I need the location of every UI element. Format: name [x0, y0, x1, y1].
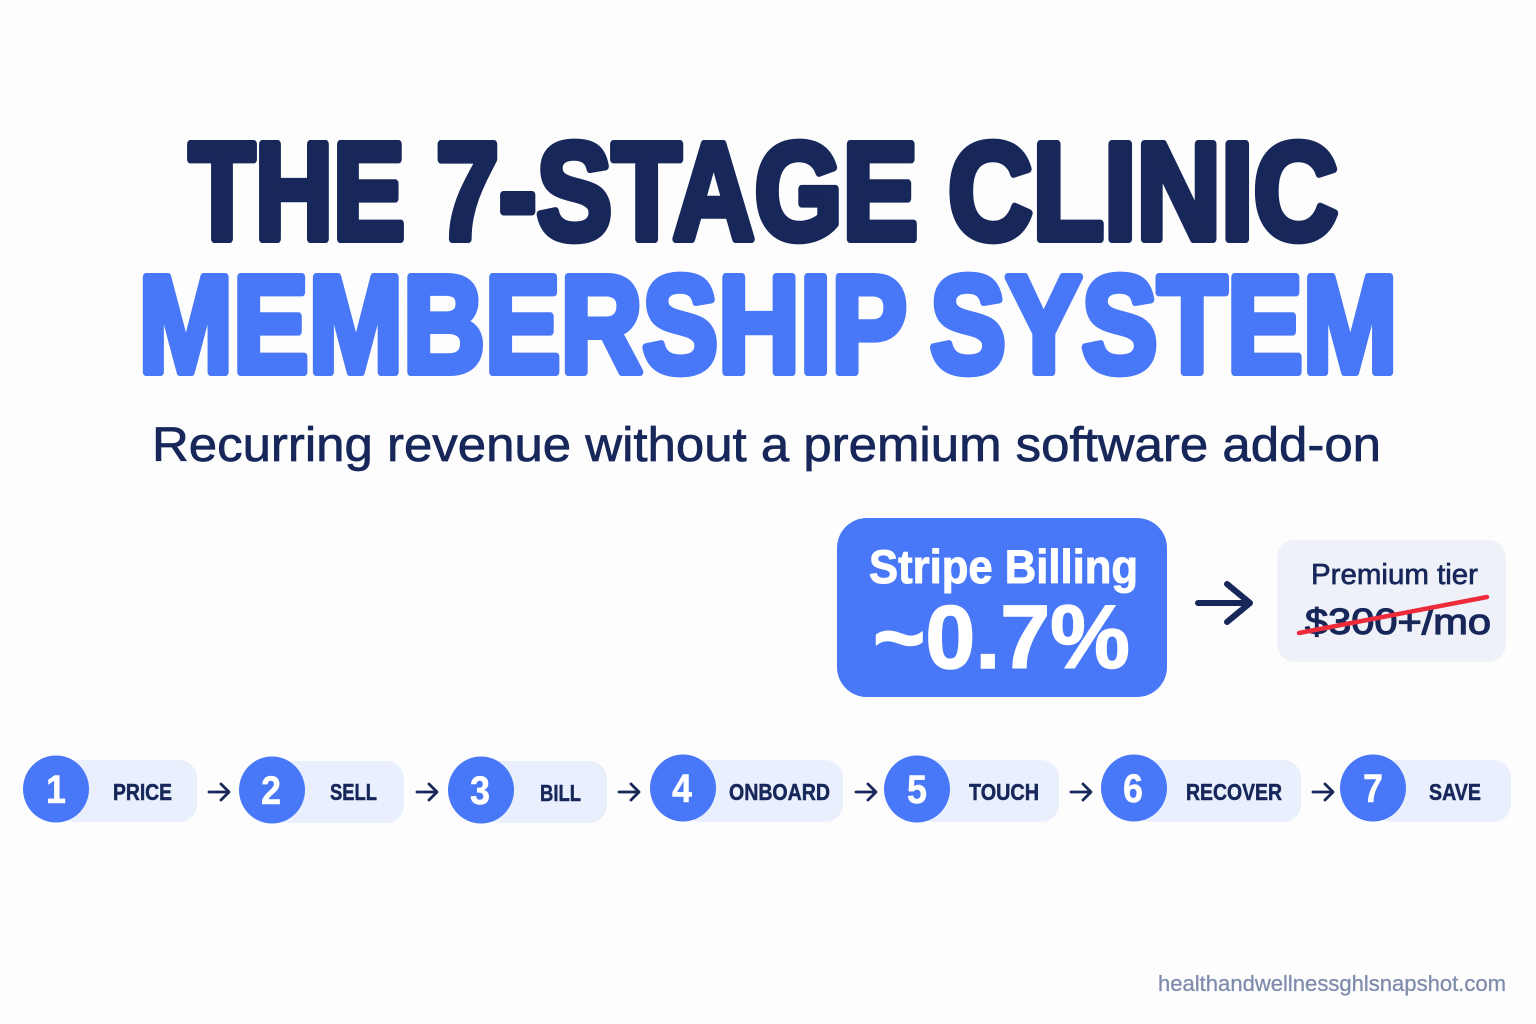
step 6: recover [1101, 754, 1301, 822]
panel: premium tier [1277, 540, 1506, 662]
step 4: onboard [650, 754, 843, 822]
title line 2: MEMBERSHIP [138, 248, 907, 402]
arrow 1 [209, 784, 229, 800]
step 3: bill: BILL [540, 780, 581, 806]
step 4: onboard: ONBOARD [729, 779, 830, 805]
subtitle: Recurring revenue without a premium software add-on [152, 419, 1381, 472]
callout: stripe billing: ~0.7% [873, 588, 1130, 688]
callout: stripe billing [837, 518, 1167, 697]
title line 1: CLINIC [948, 115, 1338, 269]
title line 1: THE [189, 115, 405, 269]
step 4: onboard: 4 [672, 767, 693, 811]
step 1: price [23, 756, 197, 822]
step 2: sell: 2 [261, 769, 281, 813]
arrow 6 [1313, 784, 1333, 800]
step 6: recover: 6 [1123, 767, 1143, 811]
arrow 3 [619, 784, 639, 800]
step 7: save: 7 [1363, 767, 1383, 811]
arrow 4 [856, 784, 876, 800]
step 6: recover: RECOVER [1186, 779, 1282, 805]
step 3: bill: 3 [470, 769, 490, 813]
step 2: sell [239, 756, 404, 824]
title line 1: 7-STAGE [436, 115, 918, 269]
arrow: comparison [1198, 584, 1250, 622]
title line 1 [189, 115, 1338, 269]
title line 2: SYSTEM [930, 248, 1398, 402]
step 7: save: SAVE [1429, 779, 1481, 805]
step 5: touch: TOUCH [969, 779, 1039, 805]
arrow 2 [417, 784, 437, 800]
arrow 5 [1071, 784, 1091, 800]
callout: stripe billing: Stripe Billing [869, 540, 1138, 593]
step 5: touch [884, 756, 1059, 822]
panel: premium tier: $300+/mo [1305, 601, 1491, 642]
step 3: bill [448, 756, 607, 824]
step 7: save [1340, 754, 1511, 822]
step 1: price: 1 [46, 768, 66, 812]
panel: premium tier: Premium tier [1311, 559, 1478, 591]
step 5: touch: 5 [907, 768, 927, 812]
step 1: price: PRICE [113, 779, 172, 805]
step 2: sell: SELL [330, 779, 377, 805]
footer url: healthandwellnessghlsnapshot.com [1158, 971, 1506, 996]
